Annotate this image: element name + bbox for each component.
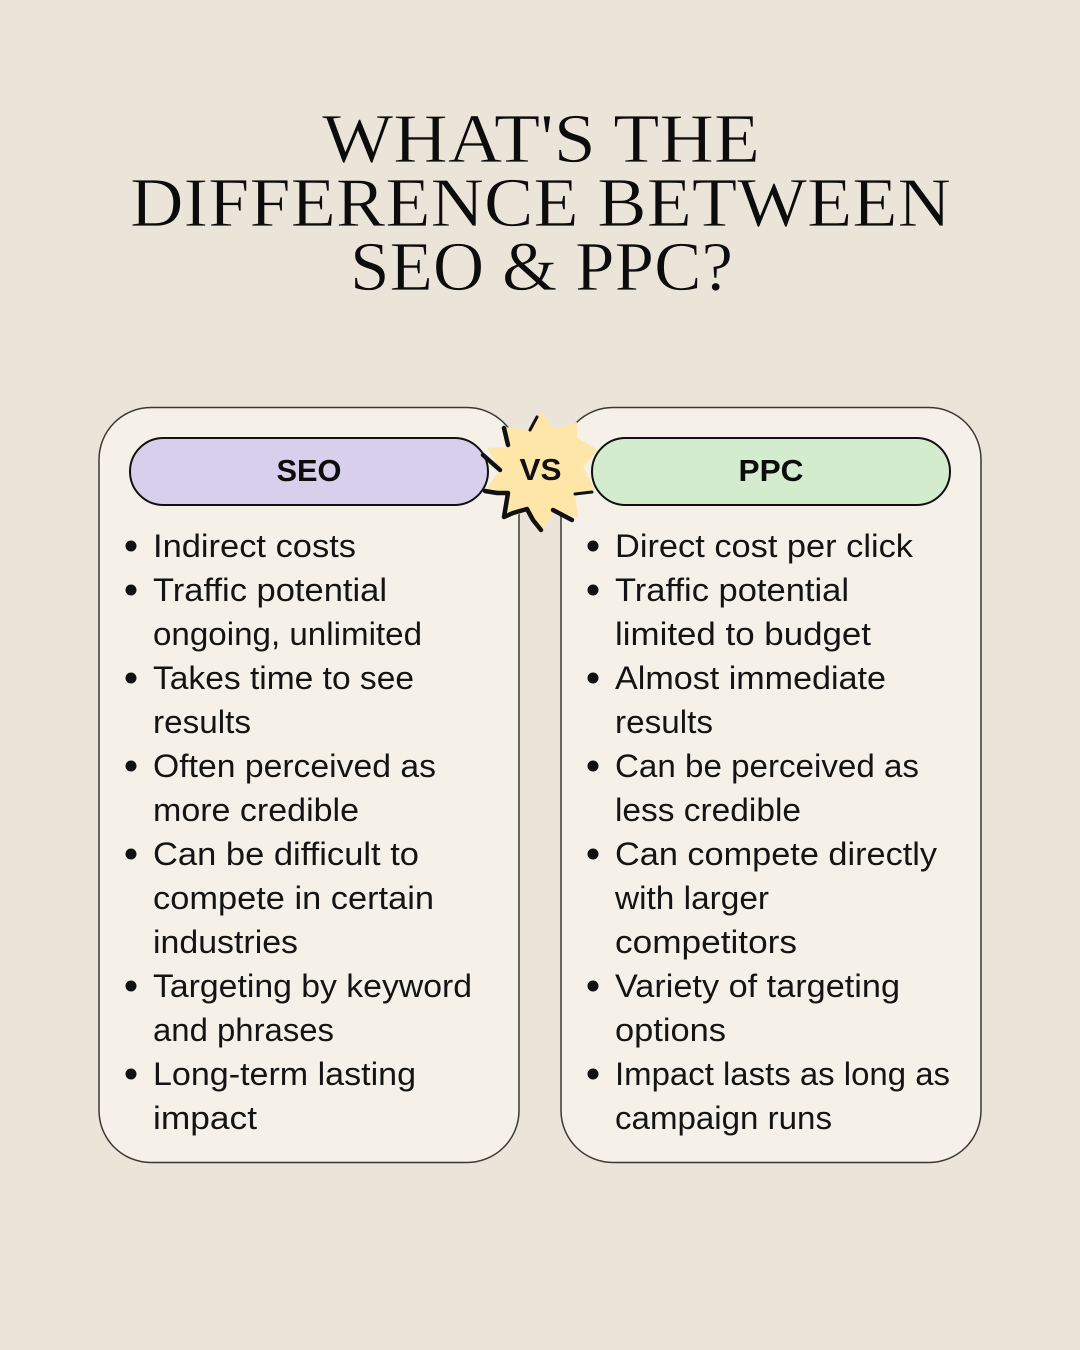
PPC bullet list: Variety of targeting: [615, 968, 900, 1004]
SEO bullet list: Indirect costs: [153, 528, 356, 564]
PPC bullet list: Almost immediate: [615, 660, 886, 696]
SEO bullet list: ongoing, unlimited: [153, 616, 422, 652]
SEO bullet list: [126, 528, 472, 1136]
SEO header pill: SEO: [276, 453, 342, 488]
PPC panel background: [561, 408, 981, 1162]
SEO bullet list: Targeting by keyword: [153, 968, 472, 1004]
PPC bullet list: Traffic potential: [615, 572, 849, 608]
PPC bullet list: Direct cost per click: [615, 528, 914, 564]
panel: SEO: [99, 408, 519, 1162]
PPC header pill: PPC: [738, 453, 804, 488]
PPC bullet list: Can compete directly: [615, 836, 937, 872]
PPC bullet list: Can be perceived as: [615, 748, 919, 784]
VS starburst badge: VS: [520, 452, 562, 487]
PPC bullet list: Impact lasts as long as: [615, 1056, 950, 1092]
title: [130, 101, 951, 306]
SEO header pill: [130, 438, 488, 505]
PPC bullet list: campaign runs: [615, 1100, 832, 1136]
SEO panel background: [99, 408, 519, 1162]
PPC bullet list: competitors: [615, 924, 797, 960]
SEO bullet list: more credible: [153, 792, 359, 828]
title: DIFFERENCE BETWEEN: [130, 165, 951, 242]
PPC bullet list: with larger: [614, 880, 769, 916]
SEO bullet list: Can be difficult to: [153, 836, 419, 872]
SEO bullet list: Often perceived as: [153, 748, 436, 784]
SEO bullet list: industries: [153, 924, 298, 960]
panel: PPC: [561, 408, 981, 1162]
SEO bullet list: Traffic potential: [153, 572, 387, 608]
PPC bullet list: less credible: [615, 792, 801, 828]
SEO bullet list: compete in certain: [153, 880, 434, 916]
SEO bullet list: impact: [153, 1100, 257, 1136]
title: WHAT'S THE: [322, 101, 760, 178]
title: SEO & PPC?: [350, 229, 733, 306]
PPC bullet list: limited to budget: [615, 616, 871, 652]
PPC bullet list: [588, 528, 950, 1136]
SEO bullet list: Long-term lasting: [153, 1056, 416, 1092]
PPC bullet list: options: [615, 1012, 726, 1048]
PPC header pill: [592, 438, 950, 505]
VS starburst badge: [483, 412, 598, 530]
PPC bullet list: results: [615, 704, 713, 740]
SEO bullet list: and phrases: [153, 1012, 334, 1048]
SEO bullet list: Takes time to see: [153, 660, 414, 696]
SEO bullet list: results: [153, 704, 251, 740]
